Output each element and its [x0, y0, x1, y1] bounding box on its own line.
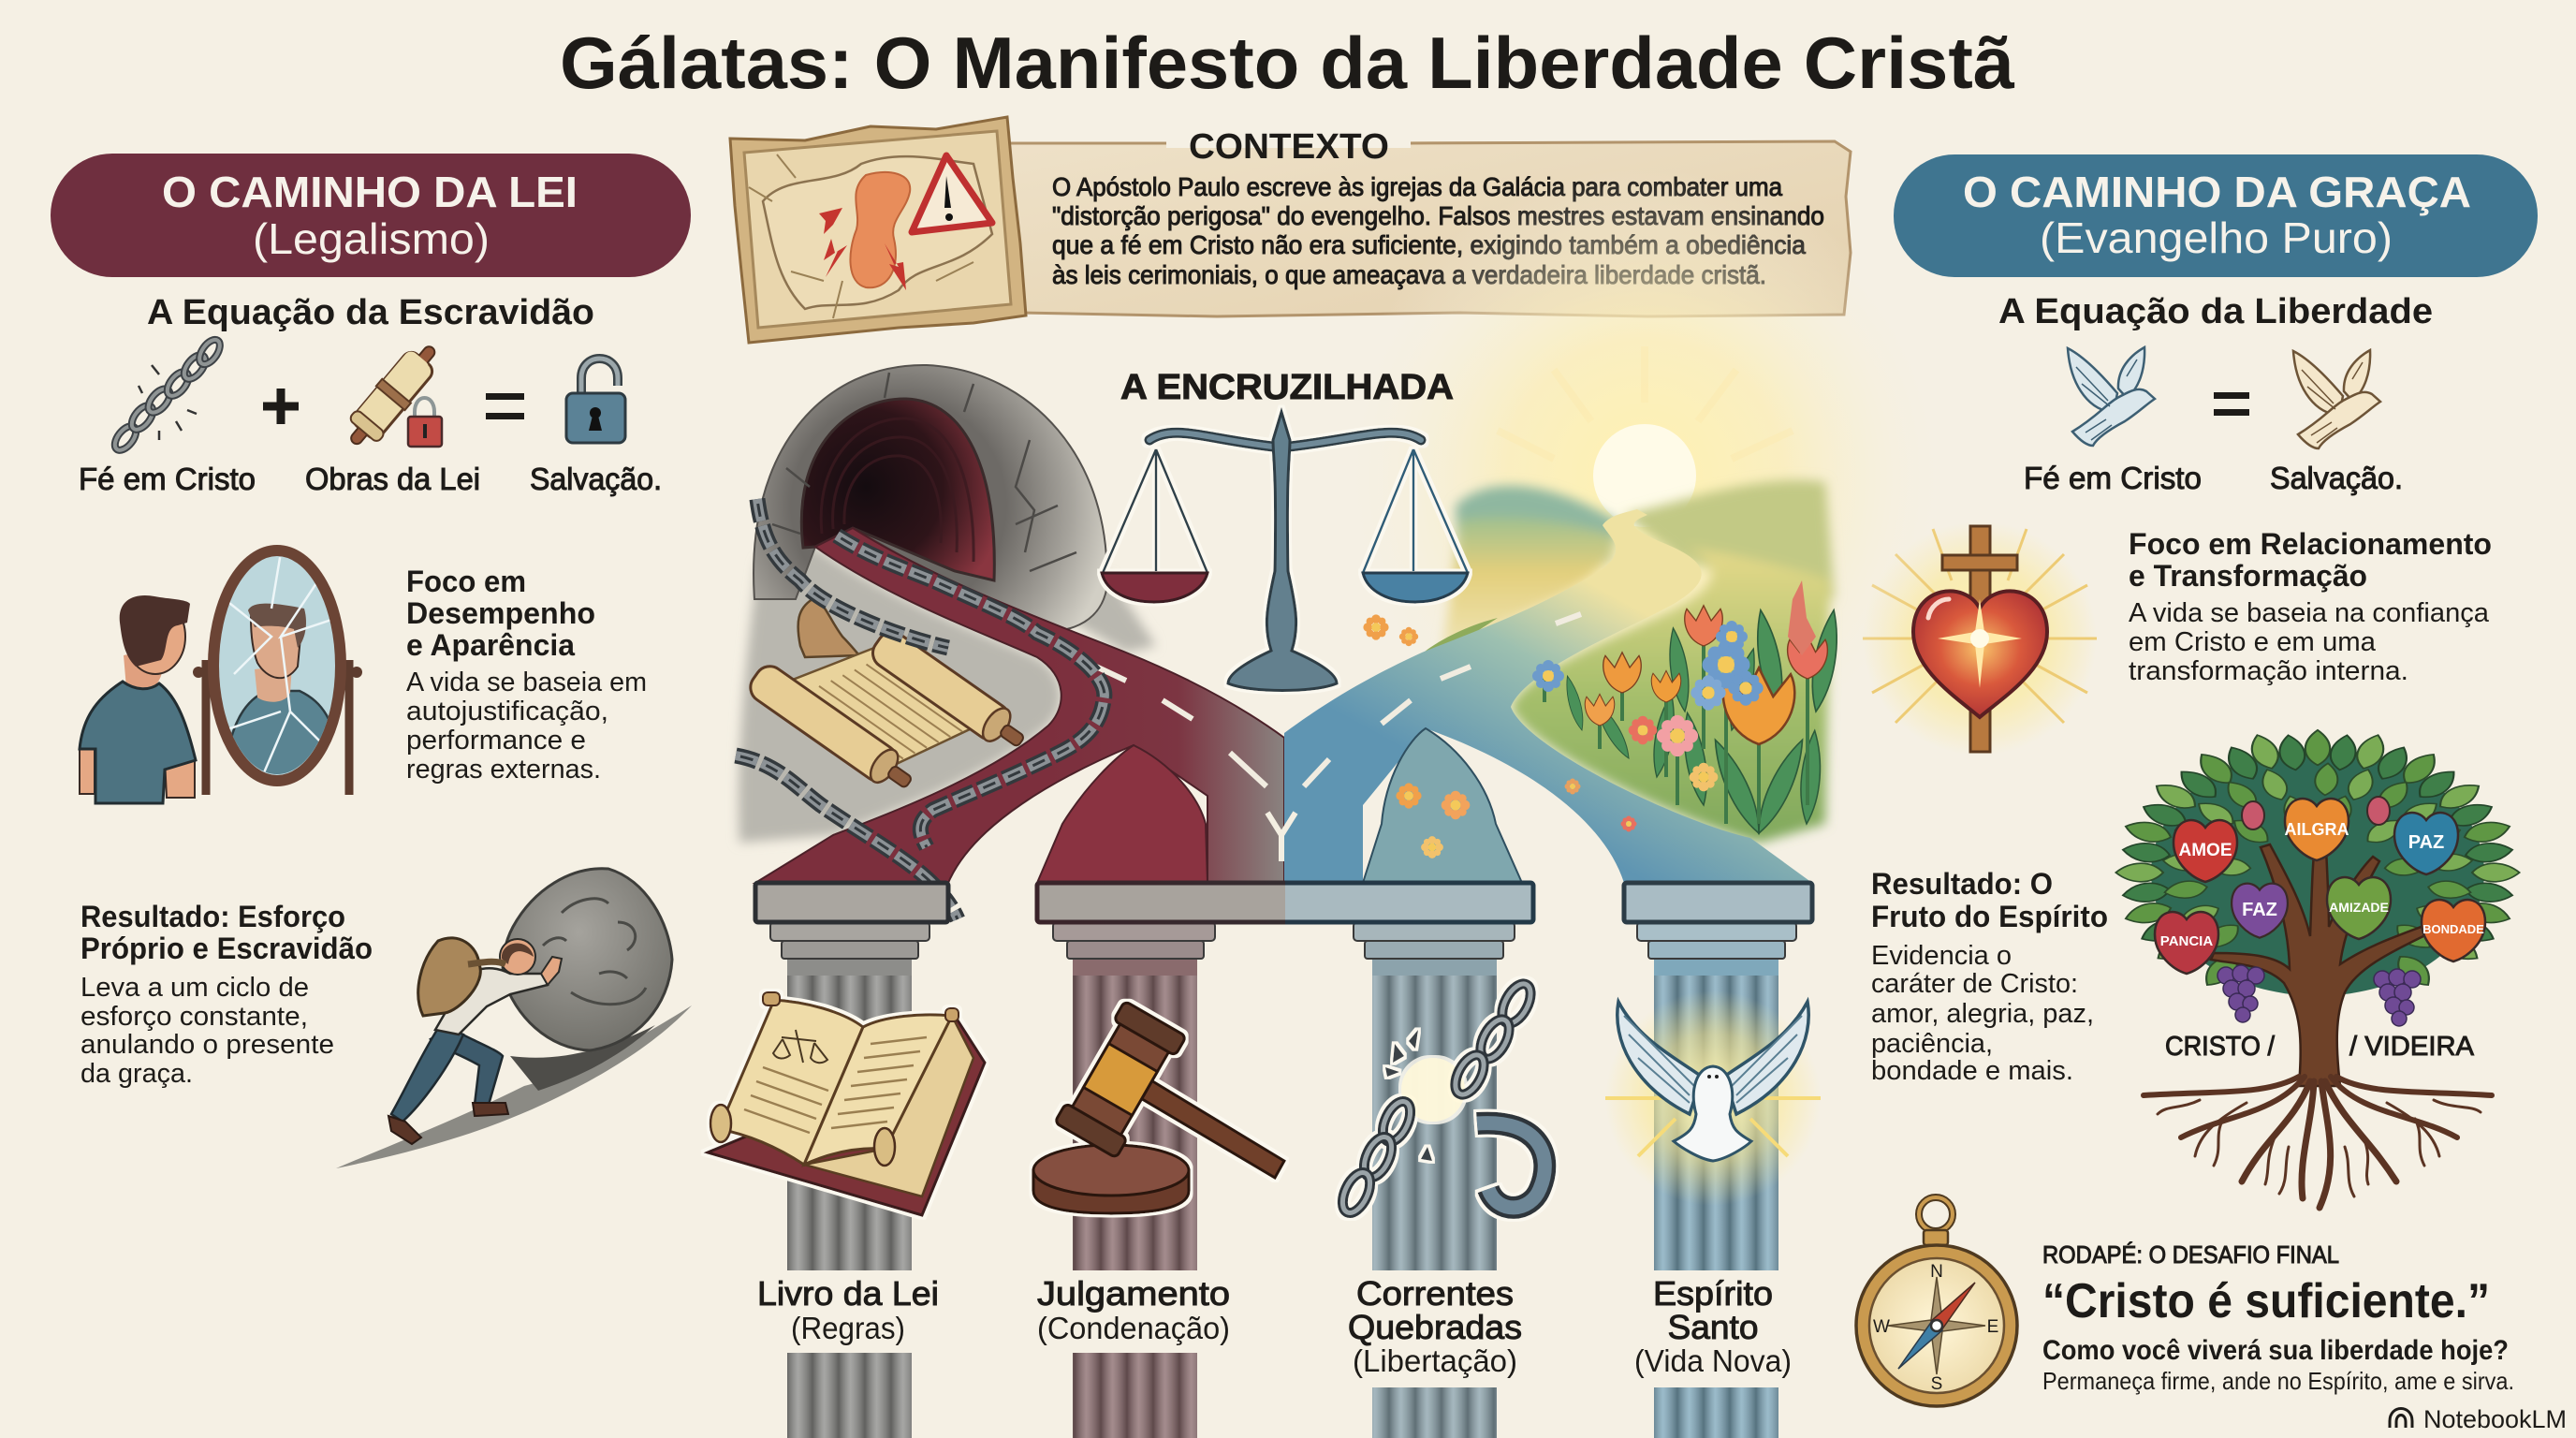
- label: correntes quebradas: [1348, 1274, 1522, 1378]
- text block: resultado esforço: [80, 900, 373, 1089]
- icon: holy spirit dove: [1605, 990, 1821, 1206]
- fruits with virtue names: FAZ: [2242, 900, 2277, 920]
- text block: foco em relacionamento: [2129, 527, 2492, 686]
- fruits with virtue names: AILGRA: [2284, 820, 2349, 839]
- text block: foco em desempenho: A vida se baseia em: [406, 668, 647, 697]
- tunnel of the law: [739, 365, 1156, 843]
- icon: compass: [1856, 1197, 2017, 1406]
- label: livro da lei: (Regras): [791, 1311, 905, 1345]
- grape clusters: [2217, 965, 2421, 1026]
- sack by the tunnel: [798, 599, 859, 657]
- icon: scroll and padlock: [339, 336, 446, 455]
- label: correntes quebradas: Correntes: [1356, 1274, 1514, 1313]
- icon: book of the law: [708, 992, 985, 1215]
- label: espírito santo: Santo: [1668, 1308, 1758, 1346]
- text block: foco em desempenho: autojustificação,: [406, 697, 608, 726]
- header pill: o caminho da lei: O CAMINHO DA LEI: [162, 168, 578, 216]
- header pill: caminho da graça: [1894, 154, 2538, 277]
- label: julgamento: (Condenação): [1037, 1311, 1230, 1345]
- fruits with virtue names: AMIZADE: [2329, 900, 2389, 915]
- illustration: man at broken mirror: [80, 550, 362, 803]
- footer quote: “Cristo é suficiente.”: [2042, 1274, 2490, 1328]
- label: cristo: CRISTO /: [2165, 1032, 2276, 1062]
- text block: foco em desempenho: [406, 565, 647, 785]
- label: salvação: Salvação.: [2270, 461, 2403, 495]
- header pill: caminho da graça: O CAMINHO DA GRAÇA: [1963, 168, 2471, 216]
- icon: cream dove: [2293, 350, 2380, 448]
- label: julgamento: Julgamento: [1037, 1274, 1230, 1313]
- footer call to action: Permaneça firme, ande no Espírito, ame e sirva.: [2042, 1367, 2514, 1395]
- label: correntes quebradas: (Libertação): [1353, 1343, 1517, 1378]
- text block: foco em relacionamento: transformação interna.: [2129, 656, 2408, 686]
- panel: caminho da lei: [51, 154, 692, 1168]
- fruits with virtue names: PAZ: [2408, 832, 2444, 853]
- footer: final challenge: [1856, 1197, 2514, 1406]
- illustration: tree of fruits: [2115, 730, 2520, 1208]
- footer eyebrow: RODAPÉ: O DESAFIO FINAL: [2042, 1240, 2339, 1269]
- central lintel: [1037, 883, 1533, 922]
- text block: resultado esforço: Próprio e Escravidão: [80, 932, 373, 965]
- text block: fruto do espírito: amor, alegria, paz,: [1871, 999, 2094, 1029]
- label: salvação: Salvação.: [530, 462, 662, 496]
- pillar: livro da lei: [755, 883, 948, 1438]
- text block: resultado esforço: da graça.: [80, 1059, 193, 1089]
- label: espírito santo: Espírito: [1653, 1274, 1773, 1313]
- flowers in the grace meadow: [1363, 580, 1844, 858]
- text block: resultado esforço: Leva a um ciclo de: [80, 973, 309, 1003]
- label: fé em cristo: Fé em Cristo: [2024, 461, 2202, 495]
- text block: foco em relacionamento: em Cristo e em uma: [2129, 627, 2377, 657]
- heading: contexto: CONTEXTO: [1189, 127, 1389, 167]
- text block: foco em desempenho: Desempenho: [406, 596, 595, 630]
- icon: broken chains: [1337, 979, 1544, 1217]
- text block: foco em relacionamento: e Transformação: [2129, 559, 2367, 593]
- label: livro da lei: Livro da Lei: [757, 1274, 939, 1313]
- equation row: [79, 336, 662, 496]
- icon: compass: E: [1987, 1317, 1998, 1337]
- text block: contexto: "distorção perigosa" do evengelho. Falsos mestres estavam ensinando: [1052, 201, 1824, 230]
- text block: fruto do espírito: Evidencia o: [1871, 941, 2012, 971]
- heading: equação da liberdade: A Equação da Liberdade: [1998, 292, 2433, 331]
- tree foliage: [2115, 730, 2520, 996]
- parchment banner: [1007, 141, 1851, 316]
- text block: fruto do espírito: [1871, 867, 2108, 1086]
- label: livro da lei: [757, 1274, 939, 1345]
- text block: foco em desempenho: e Aparência: [406, 628, 575, 662]
- blue road of grace: [1267, 509, 1812, 883]
- notebooklm mark: NotebookLM: [2423, 1405, 2567, 1433]
- text block: foco em desempenho: regras externas.: [406, 755, 601, 785]
- icon: compass: S: [1931, 1374, 1942, 1394]
- header pill: o caminho da lei: [51, 154, 691, 277]
- pillar: julgamento: [1053, 922, 1215, 1438]
- label: videira: / VIDEIRA: [2349, 1032, 2475, 1062]
- text block: foco em relacionamento: Foco em Relacionamento: [2129, 527, 2492, 561]
- illustration: man pushing boulder: [336, 869, 692, 1168]
- label: espírito santo: [1634, 1274, 1792, 1378]
- text block: contexto: [1052, 172, 1824, 289]
- header pill: caminho da graça: (Evangelho Puro): [2040, 213, 2393, 262]
- label: julgamento: [1037, 1274, 1230, 1345]
- panel: a encruzilhada: [708, 169, 1954, 1438]
- equals sign: [486, 393, 524, 419]
- icon: open padlock: [566, 359, 625, 443]
- text block: foco em relacionamento: A vida se baseia na confiança: [2129, 598, 2490, 628]
- text block: contexto: O Apóstolo Paulo escreve às igrejas da Galácia para combater uma: [1052, 172, 1783, 201]
- label: obras da lei: Obras da Lei: [305, 462, 480, 496]
- icon: compass: W: [1873, 1317, 1890, 1337]
- fruits with virtue names: [2155, 797, 2485, 974]
- pillar: correntes quebradas: [1354, 922, 1515, 1438]
- text block: foco em desempenho: Foco em: [406, 565, 526, 598]
- label: espírito santo: (Vida Nova): [1634, 1343, 1792, 1378]
- fruits with virtue names: AMOE: [2179, 841, 2232, 860]
- title: Gálatas: O Manifesto da Liberdade Cristã: [560, 22, 2015, 104]
- text block: resultado esforço: anulando o presente: [80, 1030, 334, 1060]
- label: fé em cristo: Fé em Cristo: [79, 462, 256, 496]
- icon: broken chain: [110, 336, 224, 454]
- icon: compass: N: [1930, 1262, 1943, 1282]
- equals sign: [2214, 392, 2249, 416]
- label: correntes quebradas: Quebradas: [1348, 1308, 1522, 1346]
- tree roots: [2144, 1077, 2492, 1208]
- text block: fruto do espírito: paciência,: [1871, 1029, 1993, 1059]
- text block: contexto: que a fé em Cristo não era suficiente, exigindo também a obediência: [1052, 230, 1807, 259]
- heading: equação da escravidão: A Equação da Escravidão: [147, 293, 594, 332]
- icon: blue dove: [2068, 347, 2155, 446]
- fruits with virtue names: BONDADE: [2422, 922, 2484, 936]
- footer question: Como você viverá sua liberdade hoje?: [2042, 1335, 2509, 1366]
- fruits with virtue names: PANCIA: [2160, 933, 2213, 949]
- text block: fruto do espírito: bondade e mais.: [1871, 1056, 2073, 1086]
- icon: heart and cross: [1863, 521, 2097, 756]
- pillar: espírito santo: [1624, 883, 1812, 1438]
- text block: contexto: às leis cerimoniais, o que ameaçava a verdadeira liberdade cristã.: [1052, 260, 1766, 289]
- maroon road of the law: [755, 528, 1284, 883]
- plus sign: [263, 389, 299, 424]
- panel: contexto: [730, 117, 1851, 343]
- tree trunk and branches: [2211, 829, 2437, 1086]
- panel: caminho da graça: [1856, 154, 2567, 1433]
- text block: fruto do espírito: Fruto do Espírito: [1871, 900, 2108, 933]
- text block: fruto do espírito: caráter de Cristo:: [1871, 969, 2078, 999]
- icon: judge gavel: [1033, 1001, 1284, 1213]
- landscape: sky and hills: [1336, 169, 1954, 843]
- text block: resultado esforço: esforço constante,: [80, 1002, 308, 1032]
- scroll of the law: [745, 580, 1032, 838]
- text block: resultado esforço: Resultado: Esforço: [80, 900, 345, 933]
- header pill: o caminho da lei: (Legalismo): [253, 214, 490, 263]
- icon: galatia map: [730, 117, 1026, 343]
- chains of the law: [736, 499, 1105, 919]
- text block: foco em desempenho: performance e: [406, 726, 586, 756]
- text block: fruto do espírito: Resultado: O: [1871, 867, 2053, 901]
- icon: balance scale: [1102, 412, 1468, 691]
- heading: a encruzilhada: A ENCRUZILHADA: [1120, 368, 1454, 407]
